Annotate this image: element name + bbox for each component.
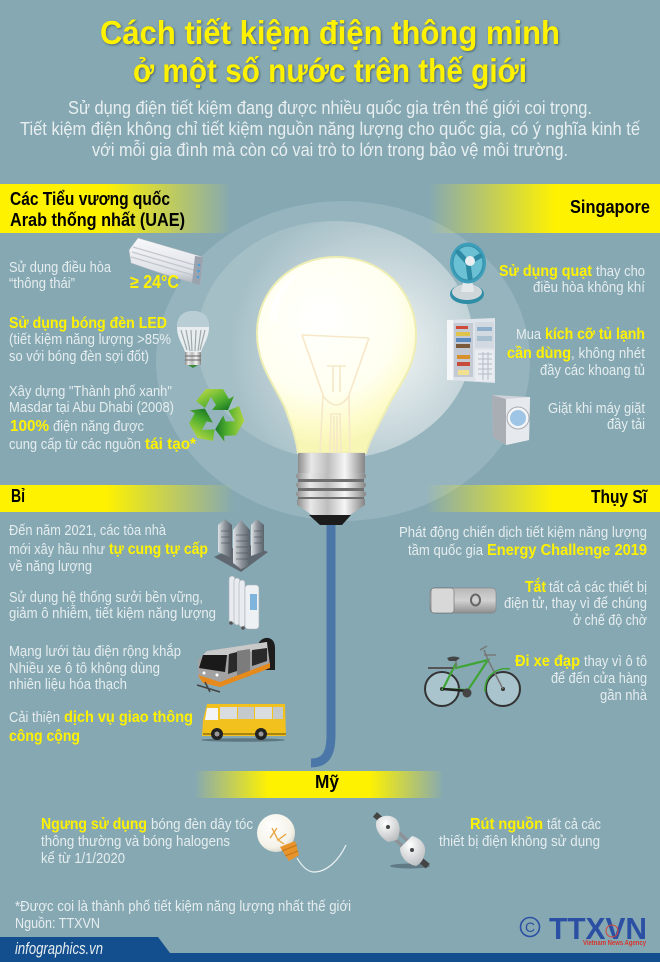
text: stop using filament bulbs: Ngưng sử dụng bbox=[41, 816, 147, 833]
text: electric trains: nhiên liệu hóa thạch bbox=[9, 676, 127, 693]
text: stop using filament bulbs: thông thường và bóng halogens bbox=[41, 833, 230, 850]
filament bbox=[302, 335, 369, 453]
icon: washing machine bbox=[492, 395, 530, 445]
text: full load washing bbox=[548, 400, 646, 433]
footnote and source: *Được coi là thành phố tiết kiệm năng lượng nhất thế giới bbox=[15, 898, 351, 915]
text: use a fan bbox=[499, 263, 646, 296]
text: use a fan: thay cho bbox=[596, 263, 645, 280]
text: public transport bbox=[9, 709, 193, 745]
text: stop using filament bulbs: kể từ 1/1/2020 bbox=[41, 850, 125, 867]
panel: UAE tips bbox=[9, 238, 249, 453]
text: heating system bbox=[9, 589, 216, 622]
text: Energy Challenge bbox=[399, 524, 647, 559]
text: full load washing: đầy tải bbox=[607, 416, 645, 433]
heading band: UAE bbox=[0, 184, 232, 233]
panel: Belgium tips bbox=[9, 519, 286, 745]
icon: bicycle bbox=[425, 646, 520, 706]
icon: yellow bus bbox=[201, 704, 286, 742]
heading band: Singapore: Singapore bbox=[570, 197, 650, 217]
footer bar bbox=[0, 937, 660, 962]
text: LED bulbs: (tiết kiệm năng lượng >85% bbox=[9, 331, 171, 348]
icon: fan bbox=[450, 242, 486, 304]
text: switch off devices: tất cả các thiết bị bbox=[549, 579, 647, 596]
text: cycle to shops: gần nhà bbox=[600, 687, 648, 704]
icon: open fridge bbox=[447, 318, 495, 383]
text: fridge size: đầy các khoang tủ bbox=[540, 362, 645, 379]
text: Masdar green city: 100% bbox=[10, 418, 49, 435]
logo: TTXVN: TTXVN bbox=[549, 911, 647, 946]
title bbox=[100, 14, 560, 89]
text: fridge size: kích cỡ tủ lạnh bbox=[545, 326, 645, 343]
icon: LED bulb bbox=[177, 311, 209, 368]
label: temperature: ≥ 24°C bbox=[130, 272, 179, 292]
bulb highlight bbox=[269, 272, 300, 322]
text: air conditioner: “thông thái” bbox=[9, 275, 75, 292]
text: electric trains: Nhiều xe ô tô không dùng bbox=[9, 660, 160, 677]
text: fridge size: Mua bbox=[516, 326, 542, 343]
logo: TTXVN: C bbox=[525, 919, 535, 935]
text: self-sufficient buildings: Đến năm 2021, các tòa nhà bbox=[9, 522, 167, 539]
heading band: Switzerland: Thụy Sĩ bbox=[591, 487, 648, 507]
bulb glass bbox=[257, 257, 416, 453]
icon: buildings bbox=[214, 519, 268, 572]
text: self-sufficient buildings bbox=[9, 522, 208, 575]
text: Masdar green city: Xây dựng "Thành phố xanh" bbox=[9, 383, 172, 400]
icon: power switch bbox=[430, 588, 496, 613]
text: air conditioner bbox=[9, 259, 112, 292]
text: public transport: dịch vụ giao thông bbox=[64, 709, 193, 726]
text: cycle to shops: thay vì ô tô bbox=[584, 653, 647, 670]
text: public transport: công cộng bbox=[9, 728, 80, 745]
footer bar: infographics.vn bbox=[15, 939, 103, 958]
logo: TTXVN: Vietnam News Agency bbox=[583, 940, 646, 947]
footnote and source bbox=[15, 898, 351, 932]
icon: air conditioner bbox=[129, 238, 203, 285]
icon: radiator bbox=[229, 576, 259, 630]
text: heating system: giảm ô nhiễm, tiết kiệm năng lượng bbox=[9, 605, 216, 622]
text: unplug: Rút nguồn bbox=[470, 816, 543, 833]
panel: Singapore tips bbox=[447, 242, 646, 445]
intro text bbox=[20, 98, 640, 160]
power cord bbox=[311, 520, 331, 763]
text: stop using filament bulbs bbox=[41, 816, 253, 867]
title: ở một số nước trên thế giới bbox=[133, 52, 527, 89]
bulb screw base bbox=[296, 453, 366, 525]
text: cycle to shops: Đi xe đạp bbox=[515, 653, 580, 670]
heading band: Belgium: Bỉ bbox=[11, 486, 25, 506]
text: LED bulbs bbox=[9, 315, 171, 365]
text: switch off devices bbox=[504, 577, 647, 629]
text: Masdar green city: Masdar tại Abu Dhabi (2008) bbox=[9, 399, 174, 416]
text: electric trains bbox=[9, 643, 181, 693]
heading band: USA bbox=[194, 771, 444, 798]
heading band: Singapore bbox=[428, 184, 660, 233]
text: unplug bbox=[439, 816, 601, 850]
icon: train and tunnel bbox=[197, 638, 275, 692]
text: fridge size: , không nhét bbox=[571, 345, 646, 362]
text: Masdar green city: điện năng được bbox=[53, 418, 144, 435]
text: Masdar green city: tái tạo* bbox=[145, 436, 197, 453]
footnote and source: Nguồn: TTXVN bbox=[15, 915, 100, 932]
text: unplug: thiết bị điện không sử dụng bbox=[439, 833, 600, 850]
intro text: Sử dụng điện tiết kiệm đang được nhiều quốc gia trên thế giới coi trọng. bbox=[68, 98, 592, 118]
heading band: Switzerland bbox=[425, 485, 660, 512]
text: Masdar green city: cung cấp từ các nguồn bbox=[9, 436, 141, 453]
icon: recycle arrows bbox=[184, 389, 249, 447]
text: LED bulbs: Sử dụng bóng đèn LED bbox=[9, 315, 167, 332]
icon: filament bulb bbox=[257, 814, 346, 872]
text: fridge size: cần dùng bbox=[507, 345, 571, 362]
text: public transport: Cải thiện bbox=[9, 709, 60, 726]
panel: USA tips bbox=[41, 812, 601, 872]
heading band: UAE: Arab thống nhất (UAE) bbox=[10, 210, 185, 230]
text: self-sufficient buildings: tự cung tự cấp bbox=[109, 541, 208, 558]
heading band: UAE: Các Tiểu vương quốc bbox=[10, 189, 170, 209]
text: self-sufficient buildings: về năng lượng bbox=[9, 558, 92, 575]
heading band: USA: Mỹ bbox=[315, 772, 339, 792]
title: Cách tiết kiệm điện thông minh bbox=[100, 14, 560, 51]
light bulb bbox=[257, 257, 416, 525]
text: electric trains: Mạng lưới tàu điện rộng khắp bbox=[9, 643, 181, 660]
text: use a fan: Sử dụng quạt bbox=[499, 263, 593, 280]
heading band: Belgium bbox=[0, 485, 235, 512]
text: Masdar green city bbox=[9, 383, 197, 453]
text: use a fan: điều hòa không khí bbox=[533, 279, 646, 296]
text: unplug: tất cả các bbox=[547, 816, 601, 833]
text: LED bulbs: so với bóng đèn sợi đốt) bbox=[9, 348, 149, 365]
text: Energy Challenge: Energy Challenge 2019 bbox=[487, 542, 647, 559]
text: cycle to shops bbox=[515, 653, 648, 704]
text: fridge size bbox=[507, 326, 646, 379]
icon: unplugged plugs bbox=[373, 812, 430, 869]
text: full load washing: Giặt khi máy giặt bbox=[548, 400, 646, 417]
halo: glow around the light bulb bbox=[156, 201, 530, 521]
text: switch off devices: Tắt bbox=[525, 577, 547, 596]
text: heating system: Sử dụng hệ thống sưởi bền vững, bbox=[9, 589, 203, 606]
intro text: với mỗi gia đình mà còn có vai trò to lớn trong bảo vệ môi trường. bbox=[92, 139, 568, 160]
text: air conditioner: Sử dụng điều hòa bbox=[9, 259, 112, 276]
text: Energy Challenge: tầm quốc gia bbox=[408, 542, 484, 559]
text: switch off devices: ở chế độ chờ bbox=[573, 612, 647, 629]
text: stop using filament bulbs: bóng đèn dây tóc bbox=[151, 816, 253, 833]
panel: Switzerland tips bbox=[399, 524, 648, 706]
text: self-sufficient buildings: mới xây hầu như bbox=[9, 541, 105, 558]
